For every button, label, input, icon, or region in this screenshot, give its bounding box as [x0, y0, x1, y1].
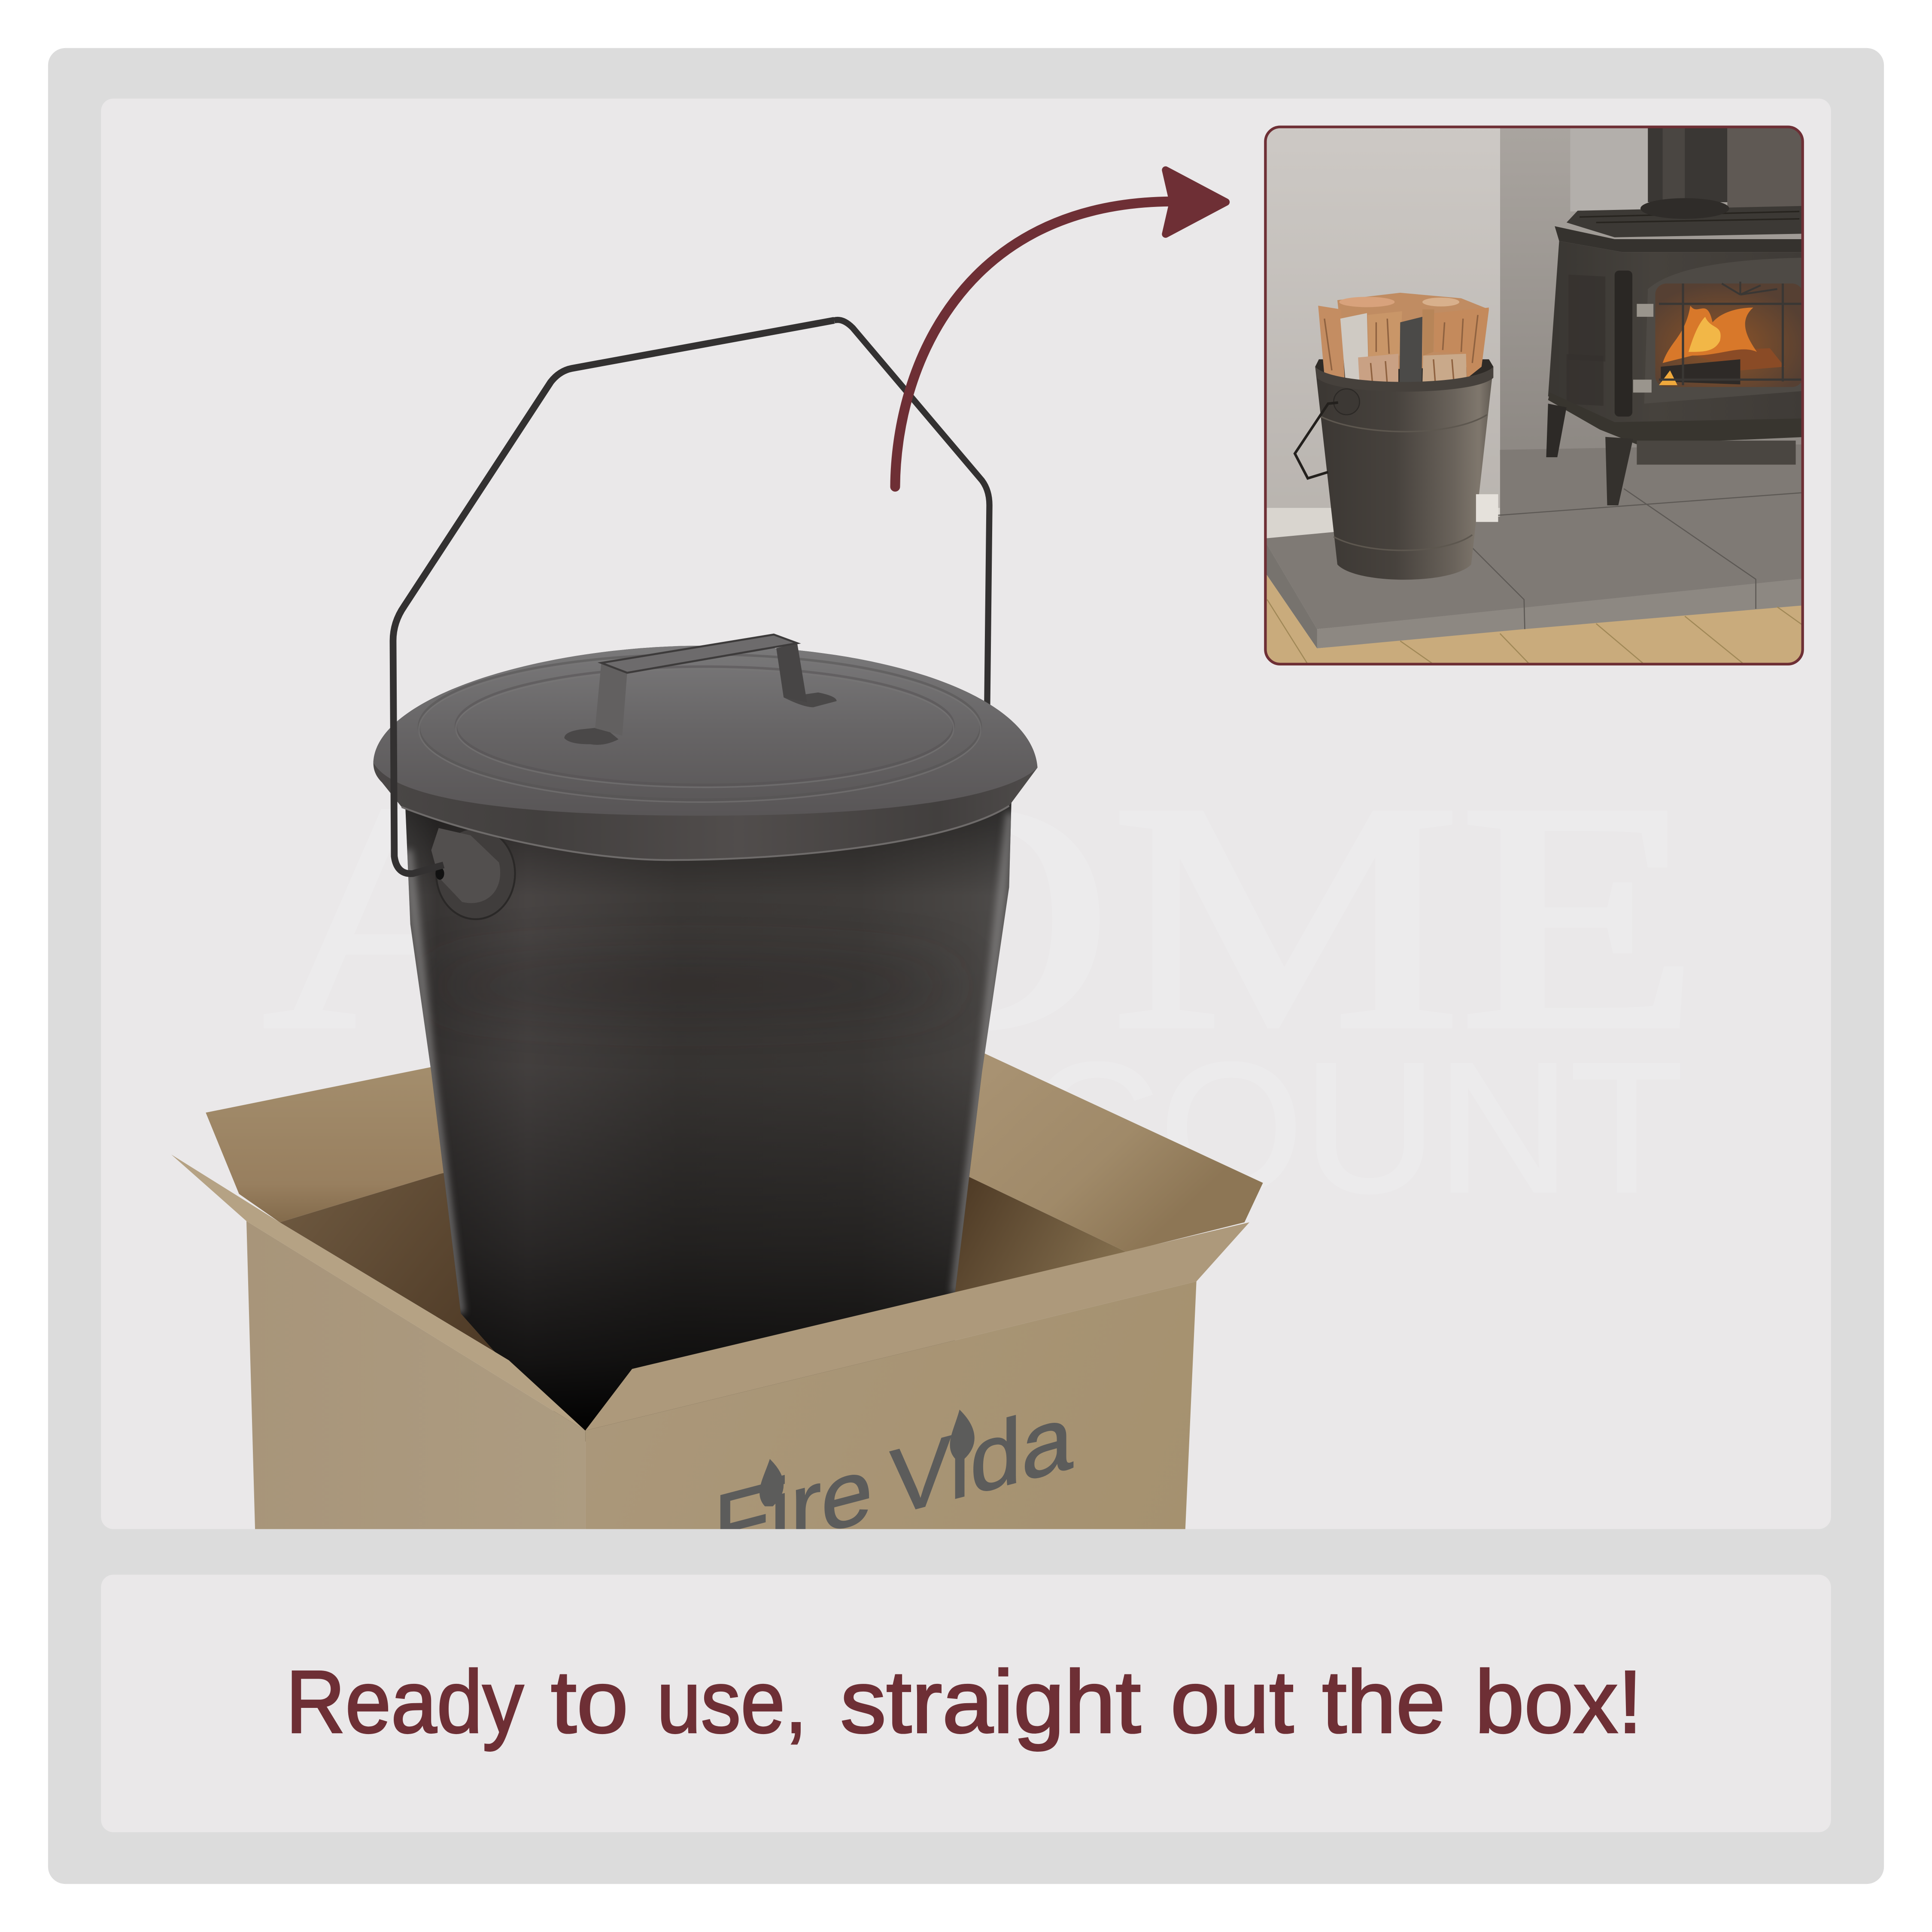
caption text: the	[1322, 1652, 1445, 1751]
bucket handle far side	[834, 320, 990, 727]
inset: fire	[1633, 282, 1801, 392]
caption text	[286, 1652, 1643, 1751]
lid handle	[564, 635, 837, 745]
panel: product scene	[101, 99, 1831, 1581]
watermark	[264, 738, 1699, 1231]
caption text: out	[1170, 1652, 1294, 1751]
inset: room	[1264, 123, 1807, 666]
caption text: box!	[1475, 1652, 1643, 1751]
arrow	[895, 170, 1226, 487]
bucket lid	[374, 635, 1037, 860]
box logo: Fire Vida	[714, 1384, 1073, 1581]
inset: bucket	[1295, 293, 1493, 580]
inset: bucket in use by the stove	[1264, 123, 1807, 666]
inset: stove	[1546, 123, 1807, 505]
watermark: DISCOUNT	[718, 1024, 1683, 1231]
box front	[171, 1154, 1249, 1581]
caption text: straight	[840, 1652, 1141, 1751]
box logo: Fire Vida: Vida	[890, 1384, 1073, 1535]
bucket handle near side	[393, 320, 834, 874]
caption text: Ready	[286, 1652, 524, 1751]
box logo: Fire Vida: Fire	[714, 1436, 872, 1581]
product: ash bucket with box	[171, 320, 1263, 1581]
bucket lug	[431, 828, 515, 919]
caption text: use,	[657, 1652, 807, 1751]
inset: firewood	[1318, 293, 1489, 385]
panel: caption	[101, 1575, 1831, 1832]
caption text: to	[551, 1652, 629, 1751]
bucket body	[394, 789, 1023, 1448]
box back flaps and interior	[206, 1054, 1263, 1352]
watermark: AHOME	[264, 738, 1699, 1095]
